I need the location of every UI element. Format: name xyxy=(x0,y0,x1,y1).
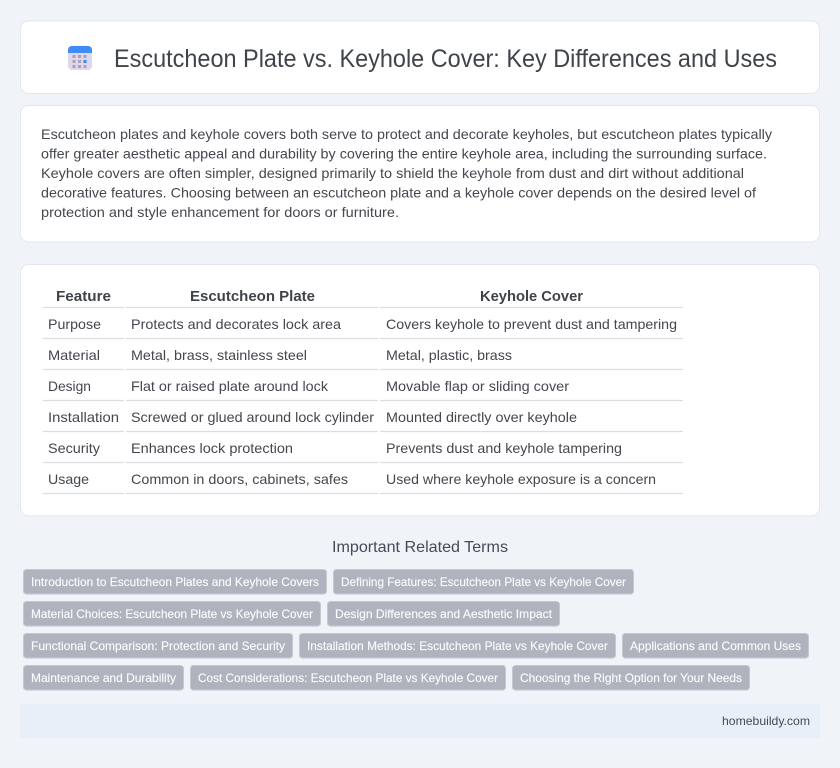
related terms tags: Installation Methods: Escutcheon Plate vs Keyhole Cover xyxy=(307,639,608,653)
related terms tags: Introduction to Escutcheon Plates and Keyhole Covers xyxy=(31,575,319,589)
related terms tags: Defining Features: Escutcheon Plate vs Keyhole Cover xyxy=(341,575,626,589)
row: usage xyxy=(48,471,656,487)
row: purpose: Purpose xyxy=(48,316,101,332)
header panel xyxy=(20,21,820,94)
footer xyxy=(20,704,820,738)
related terms tags: Design Differences and Aesthetic Impact xyxy=(335,607,553,621)
related terms tags: Applications and Common Uses xyxy=(630,639,801,653)
related terms tags: Cost Considerations: Escutcheon Plate vs Keyhole Cover xyxy=(198,671,498,685)
table header xyxy=(56,289,583,305)
row: installation xyxy=(48,409,577,425)
row: design: Design xyxy=(48,378,91,394)
footer: homebuildy.com xyxy=(722,714,810,728)
row: usage: Common in doors, cabinets, safes xyxy=(131,471,348,487)
row: material: Material xyxy=(48,347,100,363)
row: purpose: Protects and decorates lock area xyxy=(131,316,341,332)
related terms tags: Choosing the Right Option for Your Needs xyxy=(520,671,742,685)
row: design xyxy=(48,378,569,394)
intro text: decorative features. Choosing between an escutcheon plate and a keyhole cover depends on the desired level of xyxy=(41,184,756,200)
row: security: Prevents dust and keyhole tampering xyxy=(386,440,622,456)
related terms tags: Functional Comparison: Protection and Security xyxy=(31,639,285,653)
intro panel xyxy=(20,106,820,242)
related terms tags xyxy=(24,570,808,690)
row: installation: Mounted directly over keyhole xyxy=(386,409,577,425)
row: material: Metal, plastic, brass xyxy=(386,347,512,363)
row: installation: Installation xyxy=(48,409,119,425)
table header: Keyhole Cover xyxy=(480,289,583,305)
row: purpose: Covers keyhole to prevent dust and tampering xyxy=(386,316,677,332)
row: material: Metal, brass, stainless steel xyxy=(131,347,307,363)
row: design: Flat or raised plate around lock xyxy=(131,378,329,394)
row: installation: Screwed or glued around lock cylinder xyxy=(131,409,374,425)
intro text: offer greater aesthetic appeal and durability by covering the entire keyhole area, including the surrounding surface. xyxy=(41,146,767,162)
row: usage: Used where keyhole exposure is a concern xyxy=(386,471,656,487)
intro text: protection and style enhancement for doors or furniture. xyxy=(41,204,399,220)
intro text: Escutcheon plates and keyhole covers both serve to protect and decorate keyholes, but escutcheon plates typically xyxy=(41,126,772,142)
intro text: Keyhole covers are often simpler, designed primarily to shield the keyhole from dust and dirt without additional xyxy=(41,165,744,181)
row: purpose xyxy=(48,316,677,332)
row: security: Enhances lock protection xyxy=(131,440,293,456)
row: usage: Usage xyxy=(48,471,89,487)
related terms tags: Material Choices: Escutcheon Plate vs Keyhole Cover xyxy=(31,607,313,621)
row: security xyxy=(48,440,622,456)
icon: calendar xyxy=(68,46,92,70)
title: Escutcheon Plate vs. Keyhole Cover: Key Differences and Uses xyxy=(114,45,777,73)
table header: Feature xyxy=(56,289,111,305)
table header: Escutcheon Plate xyxy=(190,289,315,305)
comparison table panel xyxy=(20,264,820,516)
related terms tags: Maintenance and Durability xyxy=(31,671,176,685)
row: material xyxy=(48,347,512,363)
row: design: Movable flap or sliding cover xyxy=(386,378,569,394)
row: security: Security xyxy=(48,440,100,456)
related terms heading: Important Related Terms xyxy=(332,539,508,556)
